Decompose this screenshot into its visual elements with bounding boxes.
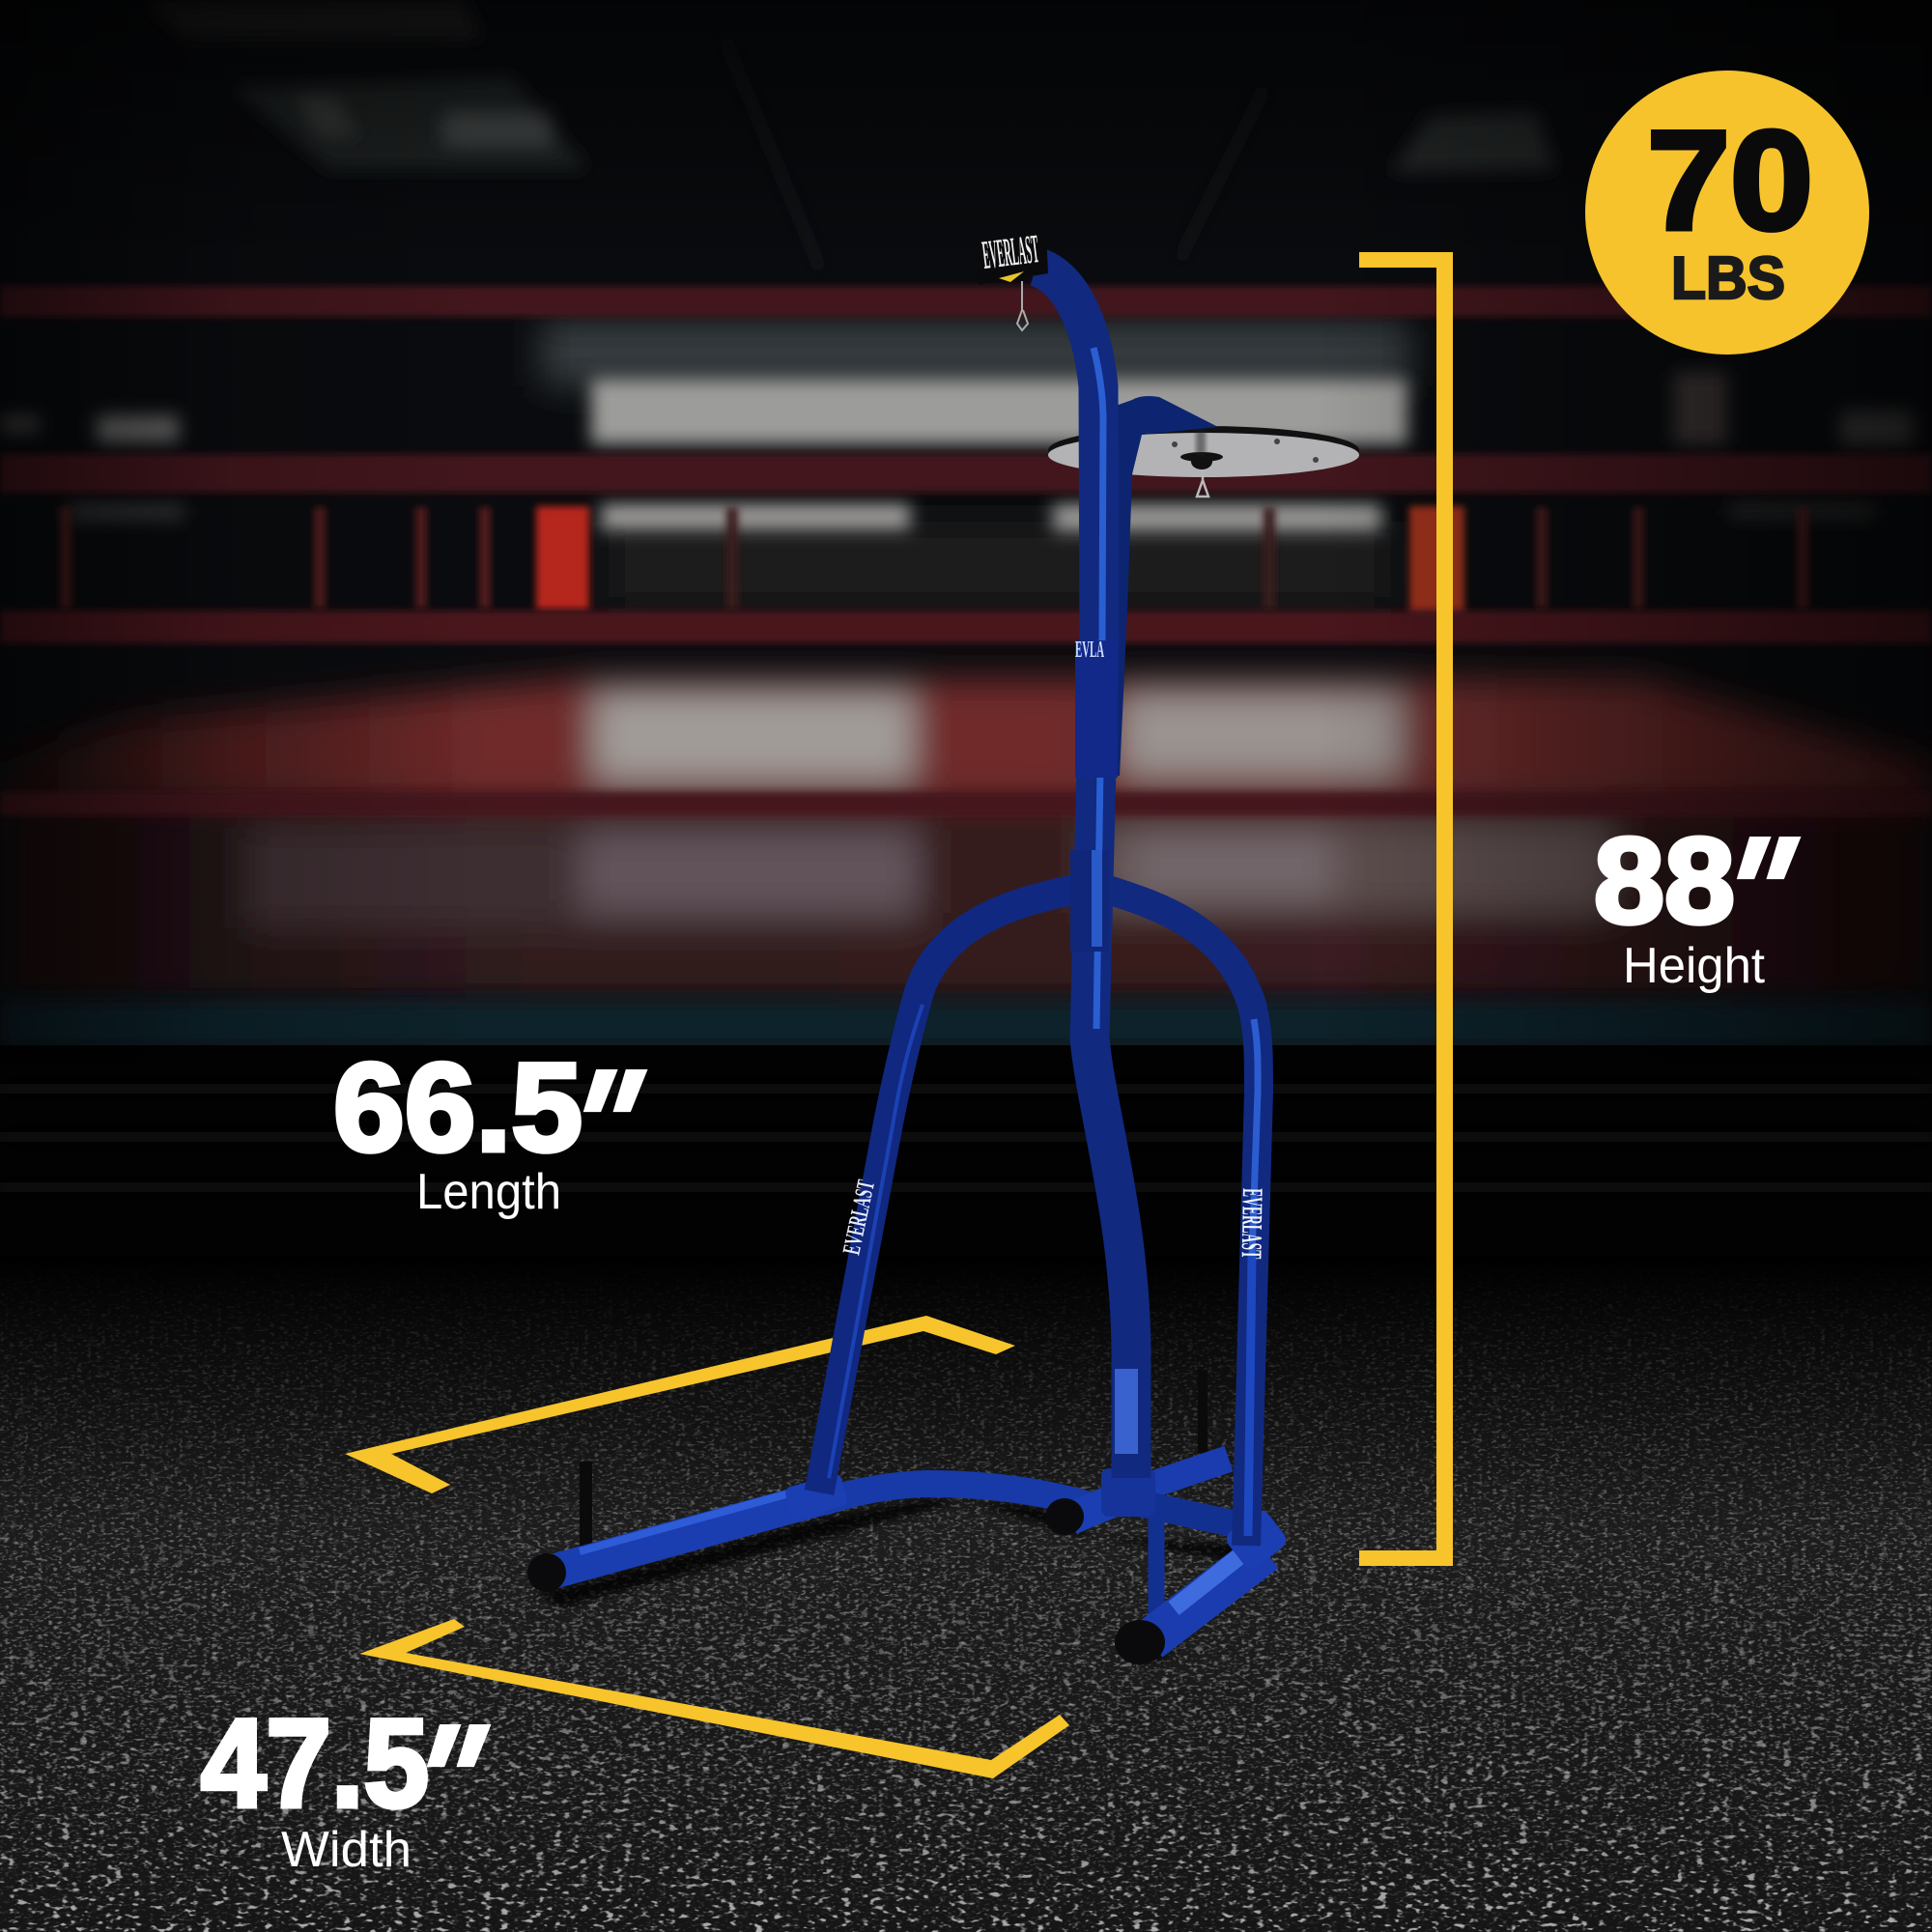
dimension label: length 66.5 inches: " bbox=[552, 1037, 652, 1215]
background: speckled rubber floor bbox=[0, 1256, 1932, 1932]
dimension bracket: length bbox=[345, 1316, 1015, 1493]
dimension label: width 47.5 inches: Width bbox=[281, 1822, 412, 1878]
background: side vignette bbox=[0, 0, 1932, 1063]
dimension label: height 88 inches: 88 bbox=[1594, 812, 1735, 949]
dimension label: width 47.5 inches: 47.5 bbox=[201, 1692, 429, 1833]
weight badge: 70 LBS: LBS bbox=[1671, 245, 1785, 312]
base tube: arched middle bbox=[821, 1484, 1101, 1509]
product: heavy bag stand bbox=[527, 227, 1359, 1664]
base tube: right foot bbox=[1150, 1549, 1265, 1640]
dimension bracket: height bbox=[1359, 252, 1453, 1566]
base tube: lower right bbox=[1121, 1499, 1236, 1524]
product: heavy bag stand: EVERLAST bbox=[1236, 1188, 1268, 1259]
joints bbox=[783, 1468, 1290, 1573]
dimension label: length 66.5 inches: 66.5 bbox=[333, 1037, 582, 1178]
product: heavy bag stand: EVLA bbox=[1075, 638, 1104, 663]
base frame bbox=[553, 1459, 1265, 1640]
background: dark stage front bbox=[0, 1045, 1932, 1296]
tag: Everlast logo bbox=[978, 227, 1048, 330]
apron bbox=[0, 1000, 1932, 1048]
dimension label: length 66.5 inches bbox=[333, 1037, 652, 1220]
right arch and leg bbox=[1105, 889, 1259, 1546]
dimension label: height 88 inches bbox=[1594, 804, 1805, 994]
dimension label: width 47.5 inches: " bbox=[395, 1691, 496, 1870]
dimension bracket: width bbox=[359, 1619, 1069, 1778]
background: blurred boxing ring bbox=[0, 0, 1932, 1063]
reinforcing plate on post bbox=[1115, 1369, 1138, 1454]
weight badge: 70 LBS: 70 bbox=[1647, 101, 1813, 259]
ropes bbox=[0, 286, 1932, 815]
disc bracket bbox=[1087, 396, 1218, 776]
dimension label: height 88 inches: Height bbox=[1623, 938, 1766, 994]
base tube: left foot bbox=[553, 1489, 831, 1572]
back wall lights bbox=[541, 319, 1410, 609]
post sleeve bbox=[1075, 640, 1118, 778]
product: heavy bag stand: EVERLAST bbox=[980, 227, 1041, 278]
dimension label: length 66.5 inches: Length bbox=[416, 1164, 561, 1220]
left arch and leg bbox=[819, 890, 1074, 1492]
rubber end caps bbox=[527, 1498, 1165, 1664]
post highlight bbox=[1094, 348, 1103, 1029]
base tube: upper right bbox=[1121, 1459, 1229, 1495]
base tube: centre foot bbox=[1070, 1490, 1140, 1519]
floor shadow bbox=[537, 1499, 1256, 1662]
dimension label: height 88 inches: " bbox=[1705, 804, 1805, 982]
speed bag disc bbox=[1048, 426, 1359, 497]
strut bbox=[1148, 1517, 1165, 1637]
pegs bbox=[580, 1370, 1208, 1550]
main post bbox=[1036, 267, 1131, 1478]
collar at arch junction bbox=[1070, 850, 1109, 952]
dimension label: width 47.5 inches bbox=[201, 1691, 496, 1878]
weight badge: 70 LBS bbox=[1585, 71, 1869, 355]
logo on left leg: EVERLAST bbox=[838, 1178, 880, 1257]
ceiling lights bbox=[145, 0, 1555, 270]
ring posts and fence bbox=[60, 506, 1808, 614]
floor of the ring bbox=[0, 678, 1932, 1000]
